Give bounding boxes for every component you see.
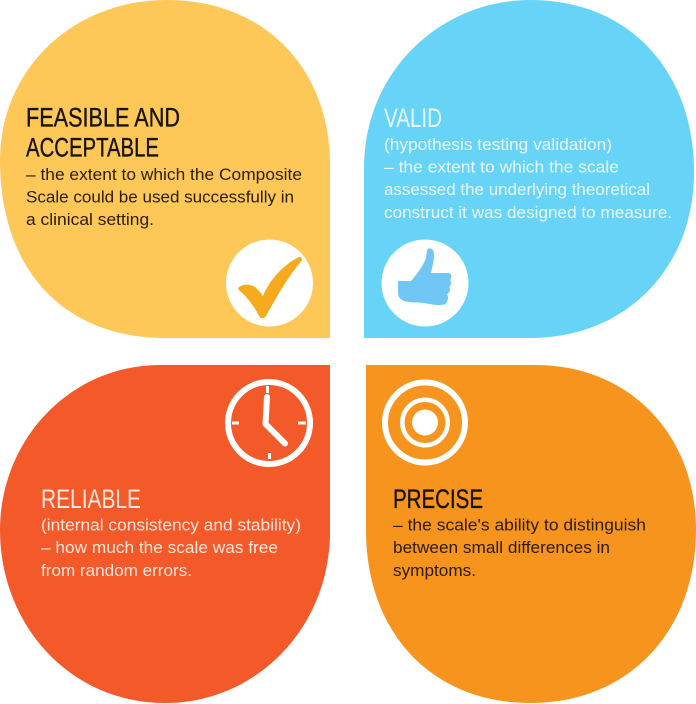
- description: feasible and acceptable: Scale could be used successfully in: [26, 188, 294, 206]
- heading: feasible and acceptable: FEASIBLE AND: [26, 102, 180, 132]
- icon: check mark: [226, 240, 313, 326]
- heading: precise: PRECISE: [393, 484, 483, 514]
- yellow petal: [0, 0, 330, 338]
- description: reliable: from random errors.: [41, 561, 192, 580]
- icon: target: [385, 382, 465, 462]
- description: precise: – the scale's ability to distinguish: [393, 516, 646, 534]
- description: reliable: – how much the scale was free: [41, 538, 278, 557]
- description: reliable: (internal consistency and stability): [41, 516, 301, 534]
- description: precise: between small differences in: [393, 538, 610, 557]
- description: feasible and acceptable: [26, 165, 302, 229]
- description: reliable: [41, 516, 301, 580]
- description: valid: assessed the underlying theoretical: [384, 180, 650, 199]
- heading: valid: VALID: [384, 103, 442, 133]
- description: valid: (hypothesis testing validation): [384, 135, 612, 154]
- description: valid: construct it was designed to measure.: [384, 203, 672, 222]
- orange petal: [366, 365, 696, 703]
- description: feasible and acceptable: – the extent to which the Composite: [26, 165, 302, 184]
- blue petal: [364, 0, 694, 338]
- description: precise: [393, 516, 646, 580]
- icon: thumbs up: [382, 240, 468, 326]
- heading: feasible and acceptable: ACCEPTABLE: [26, 132, 159, 162]
- heading: reliable: RELIABLE: [41, 484, 141, 514]
- description: valid: [384, 135, 672, 222]
- panel: reliable: [0, 365, 330, 703]
- panel: valid: [364, 0, 694, 338]
- icon: clock: [228, 382, 310, 464]
- panel: feasible and acceptable: [0, 0, 330, 338]
- description: feasible and acceptable: a clinical setting.: [26, 210, 154, 229]
- red petal: [0, 365, 330, 703]
- description: precise: symptoms.: [393, 561, 476, 580]
- description: valid: – the extent to which the scale: [384, 158, 619, 176]
- heading: feasible and acceptable: [26, 102, 180, 162]
- panel: precise: [366, 365, 696, 703]
